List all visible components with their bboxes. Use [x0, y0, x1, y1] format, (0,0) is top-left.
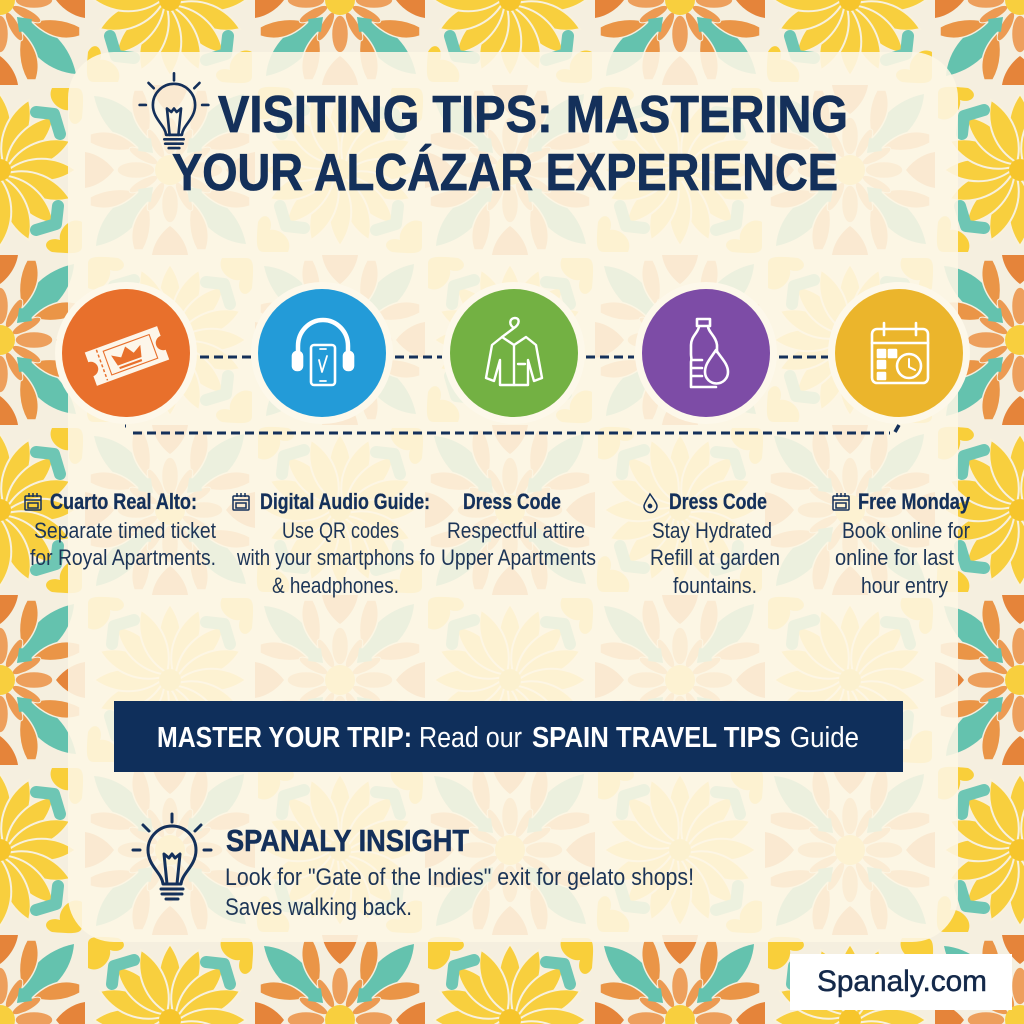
step 3: green clothing circle [443, 282, 585, 424]
tip 2: Digital Audio Guide: with your smartphons fo [236, 545, 435, 570]
tip 2: Digital Audio Guide: Use QR codes [282, 518, 399, 543]
banner: call to action: MASTER YOUR TRIP: [157, 722, 412, 754]
tip 3: Dress Code attire: Upper Apartments [441, 545, 596, 570]
icon: calendar small [233, 493, 249, 510]
tip 1: Cuarto Real Alto: Separate timed ticket [34, 518, 216, 543]
icon: ticket with crown [85, 326, 169, 386]
icon: headphones and phone [293, 320, 353, 385]
tip 5: Free Monday: online for last [835, 545, 954, 570]
banner: call to action: Guide [790, 722, 859, 754]
icon: insight light bulb [133, 814, 211, 899]
panel: translucent cream card [68, 52, 958, 942]
dashed connectors [125, 357, 899, 433]
tip 5: Free Monday: hour entry [861, 573, 948, 598]
tip 4: Stay Hydrated: Refill at garden [650, 545, 780, 570]
tip 2: Digital Audio Guide: & headphones. [272, 573, 399, 598]
icon: calendar and clock [872, 323, 928, 383]
icon: calendar small [833, 493, 849, 510]
step 2: blue audio guide circle [251, 282, 393, 424]
step 1: orange ticket circle [55, 282, 197, 424]
tip 3: Dress Code attire: Respectful attire [447, 518, 585, 543]
insight text block: Look for "Gate of the Indies" exit for gelato shops! [225, 864, 694, 891]
tip 4: Stay Hydrated: fountains. [673, 573, 757, 598]
insight text block: Saves walking back. [225, 894, 412, 921]
tip 2: Digital Audio Guide [233, 489, 435, 598]
tip 1: Cuarto Real Alto [25, 489, 216, 570]
banner: call to action: SPAIN TRAVEL TIPS [532, 722, 781, 754]
icon: calendar [25, 493, 41, 510]
icon: jacket on hanger [486, 318, 542, 385]
banner: call to action [114, 701, 903, 772]
insight text block: SPANALY INSIGHT [226, 823, 469, 858]
banner: call to action: Read our [419, 722, 522, 754]
tip 5: Free Monday: Free Monday [858, 489, 971, 514]
tip 4: Stay Hydrated: Stay Hydrated [652, 518, 772, 543]
step 5: yellow calendar circle [828, 282, 970, 424]
tip 4: Stay Hydrated [644, 489, 780, 598]
tip 3: Dress Code attire: Dress Code [463, 489, 561, 514]
logo: Spanaly.com badge [790, 954, 1012, 1010]
step 4: purple water circle [635, 282, 777, 424]
tip 4: Stay Hydrated: Dress Code [669, 489, 767, 514]
icon: water drop [644, 494, 657, 512]
tip 3: Dress Code attire [441, 489, 596, 570]
tip 5: Free Monday: Book online for [842, 518, 970, 543]
icon: title light bulb [140, 73, 208, 148]
tip 2: Digital Audio Guide: Digital Audio Guide: [260, 489, 430, 514]
tip 5: Free Monday [833, 489, 971, 598]
title: YOUR ALCÁZAR EXPERIENCE [172, 144, 838, 202]
logo: Spanaly.com badge: Spanaly.com [817, 965, 987, 998]
insight text block [225, 823, 694, 921]
tip 1: Cuarto Real Alto: Cuarto Real Alto: [50, 489, 197, 514]
icon: bottle and drop [691, 319, 728, 387]
title: VISITING TIPS: MASTERING [218, 86, 848, 144]
title [172, 86, 848, 202]
tip 1: Cuarto Real Alto: for Royal Apartments. [30, 545, 216, 570]
